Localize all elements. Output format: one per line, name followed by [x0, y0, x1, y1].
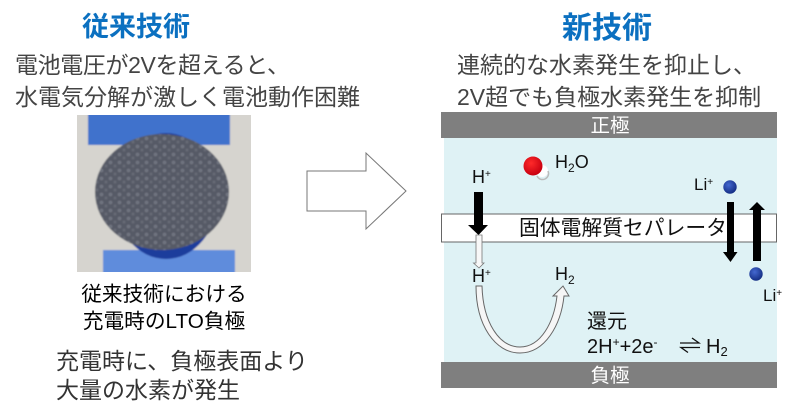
equation: reduction: + — [613, 335, 620, 349]
separator: solid electrolyte: 固体電解質セパレータ — [519, 217, 727, 240]
equation: reduction: 2 — [720, 344, 728, 359]
caption: photo — [81, 283, 247, 333]
heading: new technology: 新技術 — [562, 12, 652, 45]
label: Li+ upper: Li — [694, 175, 707, 194]
text block: hydrogen generation — [56, 348, 308, 403]
text block: new technology summary: 2V超でも負極水素発生を抑制 — [457, 84, 761, 110]
molecule: water: O — [575, 152, 589, 172]
text block: conventional problem: 電池電圧が2Vを超えると、 — [15, 52, 290, 78]
ion: Li upper — [723, 180, 737, 194]
equation: reduction: - — [654, 335, 658, 349]
label: H+ top: H — [472, 167, 485, 187]
heading: conventional technology: 従来技術 — [82, 12, 190, 42]
label: H+ bottom: + — [485, 268, 491, 279]
equation: reduction: H — [706, 336, 720, 358]
text block: conventional problem: 水電気分解が激しく電池動作困難 — [15, 84, 360, 110]
label: Li+ upper: + — [707, 177, 713, 188]
text block: hydrogen generation: 充電時に、負極表面より — [56, 348, 308, 374]
text block: hydrogen generation: 大量の水素が発生 — [56, 377, 240, 403]
label: H+ top: + — [485, 169, 491, 180]
label: Li+ lower: Li — [763, 286, 776, 305]
label: H+ bottom: H — [472, 266, 485, 286]
caption: photo: 従来技術における — [81, 283, 247, 306]
bar: positive electrode: 正極 — [590, 115, 630, 137]
bar: negative electrode: 負極 — [590, 365, 630, 387]
molecule: water: H — [555, 152, 568, 172]
arrow: H+ hollow down — [474, 235, 484, 268]
bar: negative electrode — [441, 362, 777, 388]
equation: reduction: 還元 — [587, 310, 627, 333]
molecule: water: 2 — [568, 161, 575, 175]
equation: reduction: +2e — [620, 336, 654, 358]
equation: reduction — [587, 310, 728, 359]
arrow: H+ through separator — [468, 192, 488, 235]
text block: conventional problem — [15, 52, 360, 110]
ion: Li lower — [749, 267, 763, 281]
equation: reduction: 2H — [587, 336, 613, 358]
label: Li+ lower: + — [776, 288, 782, 299]
molecule: water — [524, 152, 589, 180]
arrow: curved H+ to H2 — [476, 286, 569, 353]
caption: photo: 充電時のLTO負極 — [83, 310, 246, 333]
label: H2: H — [555, 264, 568, 284]
text block: new technology summary: 連続的な水素発生を抑止し、 — [457, 52, 756, 78]
panel: electrolyte cell — [441, 112, 782, 388]
separator: solid electrolyte — [442, 214, 776, 242]
arrow: Li down — [723, 202, 738, 262]
text block: new technology summary — [457, 52, 761, 110]
arrow: transition — [307, 153, 406, 229]
photo: LTO negative electrode — [74, 112, 254, 275]
bar: positive electrode — [441, 112, 777, 138]
label: H2: 2 — [568, 273, 575, 287]
arrow: Li up — [749, 202, 765, 261]
